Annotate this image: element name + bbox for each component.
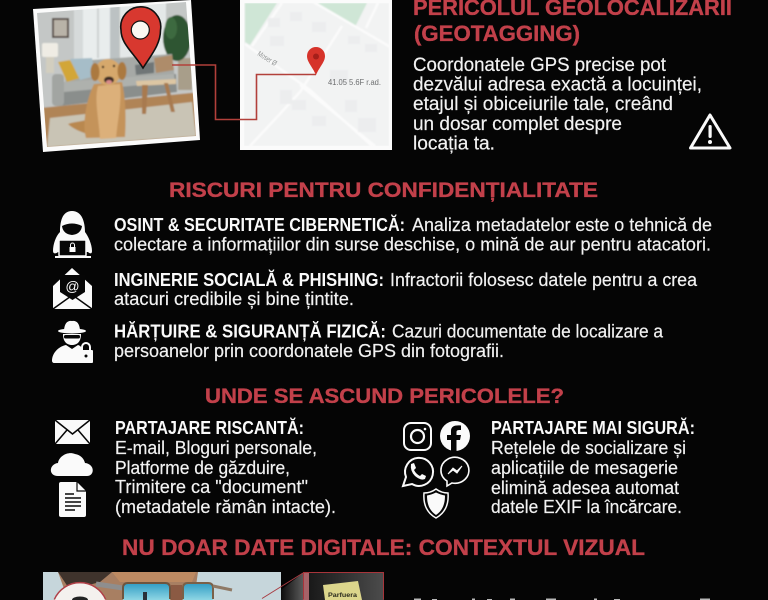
heading: privacy risks: RISCURI PENTRU CONFIDENȚIALITATE [169, 178, 598, 202]
icon: hooded hacker with laptop [53, 211, 92, 258]
heading: geotagging: (GEOTAGGING) [414, 21, 580, 46]
text block: phishing risk [114, 269, 698, 309]
map panel [240, 0, 392, 150]
icon: phishing email: @ [65, 278, 80, 294]
map coordinates label: 41.05 5.6F r.ad. [328, 78, 381, 87]
text block: OSINT risk: OSINT & SECURITATE CIBERNETICĂ: [114, 214, 405, 235]
icon: facebook [440, 421, 470, 451]
panel: detail with sticky note [303, 572, 384, 600]
text block: risky sharing: PARTAJARE RISCANTĂ: [115, 417, 304, 438]
icon: map pin [307, 47, 325, 75]
text block: geotagging description [413, 55, 702, 154]
text block: harassment risk: persoanelor prin coordonatele GPS din fotografii. [114, 341, 504, 361]
text block: OSINT risk [114, 214, 712, 254]
text block: geotagging description: etajul și obiceiurile tale, creând [413, 94, 673, 115]
map road label: Moser Ø [256, 49, 279, 68]
heading: visual context: NU DOAR DATE DIGITALE: CONTEXTUL VIZUAL [122, 535, 645, 560]
panel: detail with sticky note: Parfuera [328, 593, 358, 599]
icon: envelope [55, 420, 90, 444]
text block: OSINT risk: colectare a informațiilor din surse deschise, o mină de aur pentru atacatori. [114, 234, 711, 254]
text block: risky sharing: Trimitere ca "document" [115, 477, 308, 497]
heading: geotagging [413, 0, 732, 46]
text block: safer sharing: PARTAJARE MAI SIGURĂ: [491, 417, 695, 438]
icon: phishing email [53, 268, 92, 309]
text block: safer sharing: elimină adesea automat [491, 478, 679, 498]
text block: geotagging description: locația ta. [413, 134, 495, 154]
text block: risky sharing: Platforme de găzduire, [115, 458, 290, 478]
photo: man with reflective sunglasses [43, 572, 281, 600]
icon: instagram [404, 423, 431, 450]
icon: shield [424, 489, 448, 518]
text block: safer sharing: aplicațiile de mesagerie [491, 458, 678, 478]
icon: warning triangle [690, 115, 730, 148]
text block: harassment risk: HĂRȚUIRE & SIGURANȚĂ FIZICĂ: [114, 320, 386, 342]
connector line from photo to map [172, 65, 316, 120]
icon: spy with padlock [52, 321, 93, 363]
connector: zoom wedge to detail [262, 573, 303, 600]
text block: phishing risk: INGINERIE SOCIALĂ & PHISHING: [114, 269, 384, 290]
text block: risky sharing: (metadatele rămân intacte). [115, 497, 336, 517]
text block: geotagging description: Coordonatele GPS precise pot [413, 55, 667, 76]
text block: geotagging description: un dosar complet despre [413, 114, 622, 135]
icon: photo location pin [121, 7, 161, 68]
text block: OSINT risk: Analiza metadatelor este o tehnică de [412, 215, 712, 235]
icon: document [59, 482, 86, 517]
text block: phishing risk: atacuri credibile și bine țintite. [114, 289, 354, 309]
text block: harassment risk [114, 320, 664, 361]
clipped line of text at the bottom edge [414, 598, 710, 600]
heading: where dangers hide: UNDE SE ASCUND PERICOLELE? [205, 384, 564, 408]
text block: geotagging description: dezvălui adresa exactă a locuinței, [413, 74, 702, 96]
text block: safer sharing [491, 417, 695, 517]
icon: whatsapp [403, 458, 433, 486]
text block: safer sharing: Rețelele de socializare și [491, 438, 686, 458]
icon: cloud [51, 453, 93, 476]
text block: harassment risk: Cazuri documentate de localizare a [392, 322, 664, 342]
photo: living room with dog [30, 0, 200, 152]
text block: safer sharing: datele EXIF la încărcare. [491, 497, 682, 517]
icon: messenger [441, 457, 469, 486]
text block: risky sharing: E-mail, Bloguri personale, [115, 438, 317, 458]
text block: phishing risk: Infractorii folosesc datele pentru a crea [390, 270, 698, 290]
text block: risky sharing [115, 417, 336, 517]
